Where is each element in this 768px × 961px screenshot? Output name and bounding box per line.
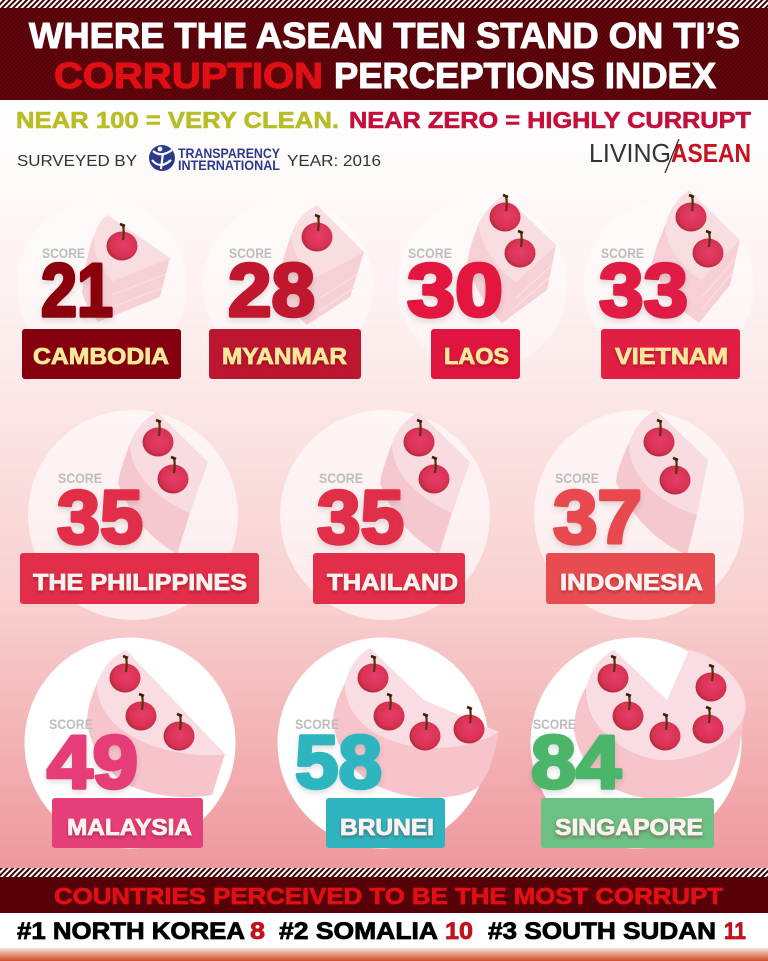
panel: Singapore: 84	[531, 720, 621, 804]
panel: Indonesia: INDONESIA	[560, 569, 703, 595]
icon: cake slice	[652, 190, 740, 323]
panel: The Philippines: SCORE	[58, 471, 102, 486]
header banner	[0, 0, 768, 100]
panel: Myanmar: SCORE	[229, 246, 272, 261]
panel: Vietnam: SCORE	[601, 246, 644, 261]
most corrupt list: 8	[250, 918, 265, 945]
panel: The Philippines: 35	[57, 475, 143, 559]
footer heading: COUNTRIES PERCEIVED TO BE THE MOST CORRUPT	[54, 883, 724, 909]
panel: Thailand	[280, 410, 490, 620]
panel: Brunei: SCORE	[295, 717, 339, 732]
panel: Vietnam: 33	[599, 248, 688, 332]
most corrupt list: #2 SOMALIA	[279, 918, 438, 945]
panel: Thailand: SCORE	[319, 471, 363, 486]
most corrupt list: 10	[445, 918, 473, 945]
panel: Cambodia	[17, 200, 187, 379]
scale explanation: NEAR 100 = VERY CLEAN.	[16, 107, 339, 133]
panel: Brunei: 58	[295, 720, 382, 804]
icon: cake slice	[82, 215, 170, 322]
panel: Singapore	[530, 638, 746, 848]
footer banner	[0, 868, 768, 913]
panel: Thailand: THAILAND	[327, 569, 458, 595]
bottom gradient strip	[0, 948, 768, 961]
most corrupt list	[0, 913, 768, 948]
panel: Vietnam: VIETNAM	[615, 343, 728, 369]
panel: Cambodia: 21	[41, 248, 113, 332]
panel: Indonesia	[534, 410, 744, 620]
panel: Myanmar	[203, 200, 373, 379]
icon: nearly whole cake	[574, 650, 746, 799]
panel: Singapore: SCORE	[533, 717, 576, 732]
panel: Myanmar: 28	[228, 248, 315, 332]
panel: Brunei: BRUNEI	[340, 814, 434, 840]
icon: cake half	[87, 650, 225, 797]
survey year: YEAR: 2016	[287, 153, 381, 170]
panel: Laos: SCORE	[408, 246, 452, 261]
logo: Living ASEAN: ASEAN	[671, 138, 751, 168]
scale explanation: NEAR ZERO = HIGHLY CURRUPT	[349, 107, 752, 133]
panel: Indonesia: SCORE	[555, 471, 599, 486]
panel: Malaysia: MALAYSIA	[67, 814, 192, 840]
logo: Living ASEAN: LIVING	[589, 138, 671, 168]
panel: Malaysia: 49	[47, 720, 138, 804]
scale explanation	[16, 107, 752, 133]
panel: Cambodia: SCORE	[42, 246, 85, 261]
panel: Vietnam	[584, 190, 754, 379]
panel: The Philippines	[20, 410, 259, 620]
title line 2: CORRUPTION	[54, 55, 323, 96]
icon: cake slice	[278, 205, 364, 325]
panel: Laos: 30	[407, 248, 503, 332]
icon: cake portion	[333, 648, 499, 798]
logo: Transparency International: INTERNATIONAL	[178, 157, 280, 173]
icon: cake slice	[467, 195, 556, 323]
icon: cake slice	[118, 412, 208, 554]
logo: Living ASEAN	[589, 138, 751, 173]
panel: Laos	[397, 195, 567, 379]
logo: Transparency International: TRANSPARENCY	[178, 145, 281, 161]
icon: cake slice	[380, 412, 470, 554]
panel: Laos: LAOS	[444, 343, 509, 369]
most corrupt list: 11	[724, 918, 746, 945]
icon: cake slice	[616, 410, 708, 555]
logo: Transparency International	[149, 145, 281, 173]
panel: Malaysia: SCORE	[49, 717, 93, 732]
surveyed by: SURVEYED BY	[17, 153, 137, 170]
most corrupt list: #1 NORTH KOREA	[17, 918, 245, 945]
panel: Brunei	[278, 638, 499, 848]
panel: Thailand: 35	[317, 475, 404, 559]
panel: Malaysia	[24, 638, 236, 848]
title line 2	[54, 55, 716, 96]
panel: Indonesia: 37	[553, 475, 642, 559]
panel: Cambodia: CAMBODIA	[33, 343, 169, 369]
panel: Myanmar: MYANMAR	[222, 343, 347, 369]
panel: The Philippines: THE PHILIPPINES	[33, 569, 247, 595]
most corrupt list: #3 SOUTH SUDAN	[488, 918, 716, 945]
title line 1: WHERE THE ASEAN TEN STAND ON TI’S	[29, 15, 740, 56]
title line 2: PERCEPTIONS INDEX	[334, 55, 716, 96]
panel: Singapore: SINGAPORE	[555, 814, 703, 840]
